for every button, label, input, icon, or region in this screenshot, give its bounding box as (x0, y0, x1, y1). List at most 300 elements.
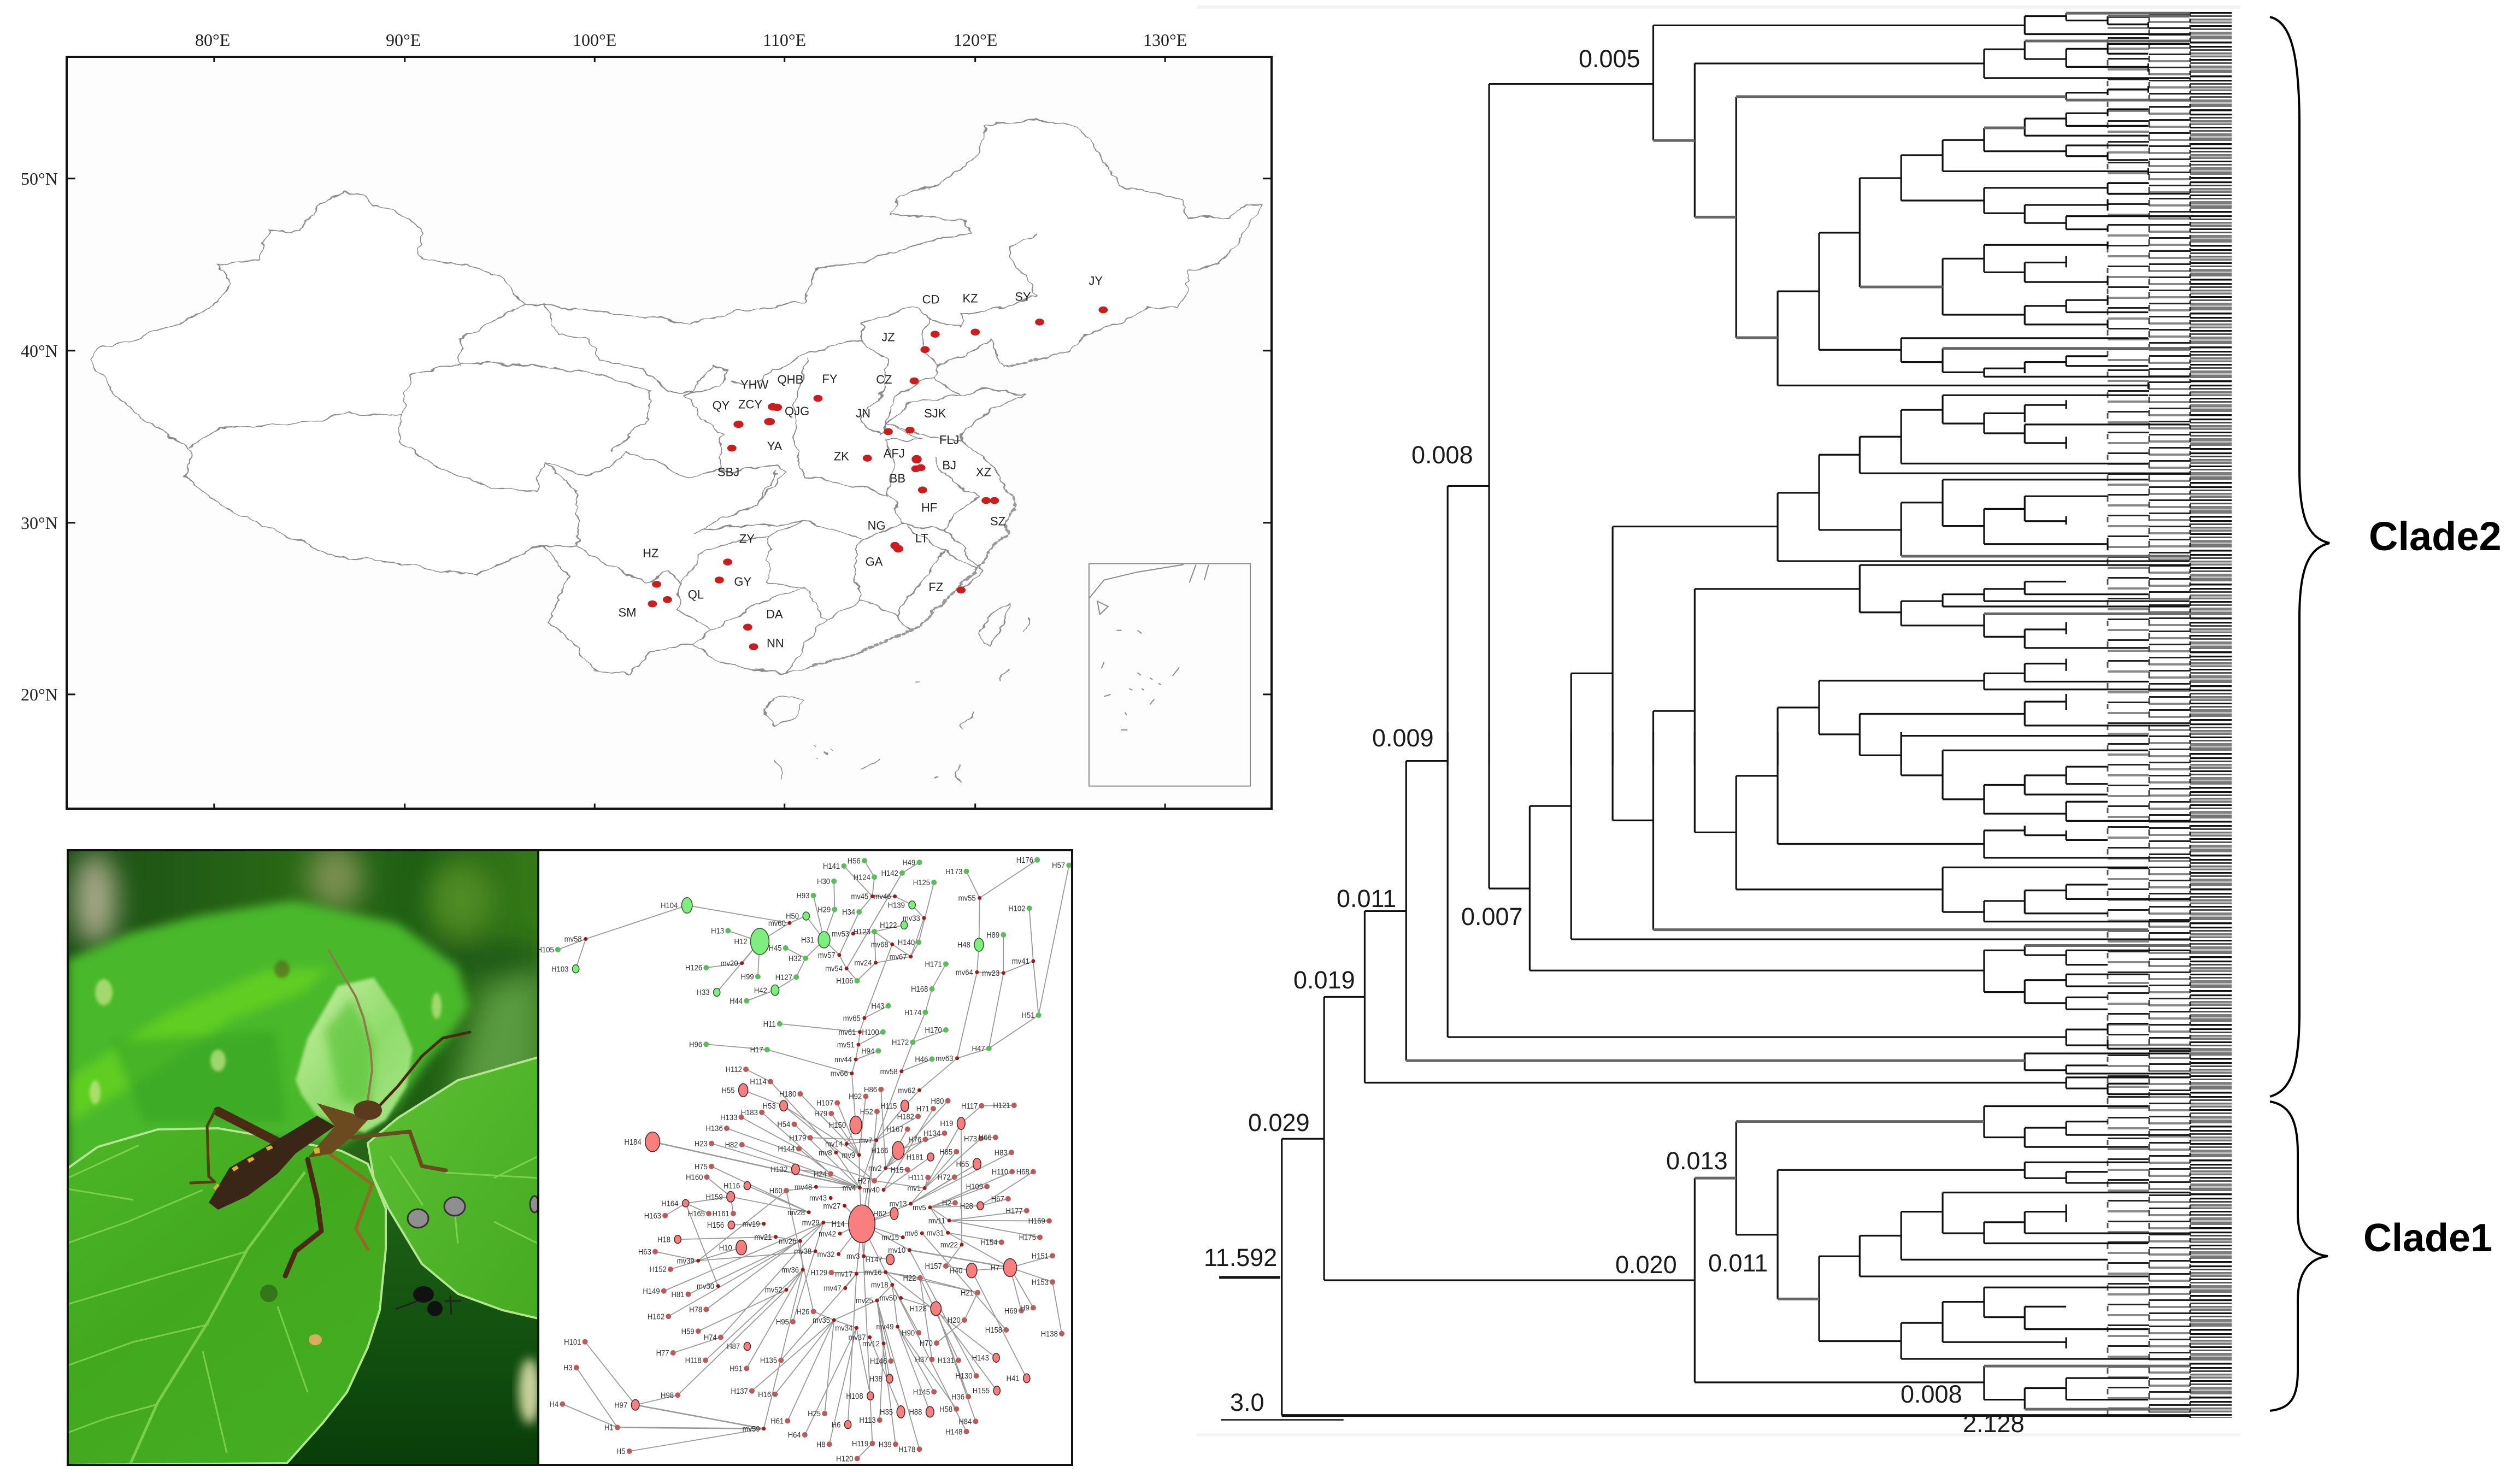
network node labels: H130 (955, 1371, 973, 1380)
network node labels: H11 (763, 1019, 776, 1028)
axis tick labels: 110°E (763, 30, 806, 50)
network node labels: H125 (913, 878, 930, 887)
network node labels: H158 (985, 1325, 1002, 1334)
branch value labels: 0.011 (1337, 885, 1396, 912)
network node labels: H95 (776, 1317, 789, 1326)
network node labels: mv22 (940, 1240, 958, 1249)
network node labels: mv27 (823, 1201, 841, 1210)
branch value labels: 0.019 (1293, 966, 1355, 994)
network node labels: mv41 (1012, 956, 1029, 965)
network node labels: H136 (705, 1123, 723, 1133)
network node labels: H19 (940, 1118, 954, 1128)
network node labels: H62 (873, 1209, 886, 1218)
site code labels: AFJ (884, 447, 905, 461)
branch value labels: 0.013 (1666, 1147, 1728, 1175)
outlines with hand-drawn wobble (90, 119, 1261, 781)
network node labels: H116 (723, 1181, 740, 1190)
network node labels: H35 (880, 1407, 893, 1416)
network node labels: H176 (1016, 855, 1033, 864)
network node labels: H117 (961, 1101, 978, 1110)
site code labels: SM (618, 605, 636, 619)
network node labels: mv51 (837, 1040, 855, 1049)
orange egg (309, 1334, 322, 1345)
network node labels: H59 (681, 1327, 695, 1336)
network node labels: H145 (913, 1387, 930, 1397)
panel: map of China (21, 30, 1272, 809)
network node labels: H137 (731, 1386, 748, 1395)
network node labels: H91 (729, 1364, 743, 1373)
network node labels: H107 (816, 1098, 833, 1108)
network node labels: H64 (788, 1430, 801, 1439)
network node labels: H160 (686, 1173, 703, 1182)
small red haplotype nodes (562, 1069, 1062, 1459)
network node labels: mv23 (982, 968, 999, 977)
network node labels: H86 (864, 1085, 877, 1094)
network node labels: H100 (862, 1027, 879, 1037)
network node labels: mv62 (898, 1086, 916, 1095)
site code labels: CZ (876, 373, 892, 386)
site code labels: ZY (739, 532, 755, 546)
network node labels: H118 (685, 1356, 702, 1365)
site code labels: GY (734, 575, 751, 588)
network node labels: H53 (763, 1101, 776, 1110)
axis tick labels: 30°N (21, 513, 58, 533)
network node labels: H46 (915, 1055, 928, 1064)
network node labels: H157 (925, 1261, 942, 1270)
network node labels: H162 (648, 1312, 664, 1321)
network node labels: H131 (938, 1356, 955, 1365)
network node labels: H55 (722, 1086, 735, 1095)
network node labels: mv67 (890, 952, 907, 961)
site code labels: KZ (962, 292, 978, 305)
network node labels: H183 (741, 1108, 758, 1117)
network node labels: mv68 (871, 940, 889, 949)
network node labels: H170 (925, 1025, 942, 1034)
province borders (191, 233, 1037, 673)
network node labels: H178 (898, 1445, 916, 1454)
network node labels: H45 (769, 943, 782, 952)
axis tick labels: 80°E (195, 30, 230, 50)
network node labels: H50 (786, 911, 799, 921)
network node labels: H175 (1019, 1233, 1036, 1242)
network node labels: mv5 (913, 1203, 926, 1212)
network node labels: H63 (638, 1247, 651, 1256)
network node labels: H154 (980, 1238, 998, 1247)
network node labels: H31 (801, 935, 814, 944)
network node labels: mv48 (795, 1182, 812, 1192)
network node labels: H124 (854, 873, 870, 882)
network node labels: H32 (789, 953, 802, 963)
site code labels: QHB (778, 373, 803, 386)
upright light leaf (296, 977, 413, 1133)
site code labels: FZ (928, 580, 943, 594)
pale background blob (519, 1358, 540, 1424)
photo background (69, 851, 537, 1230)
dark lower background (288, 1241, 537, 1464)
dark speck on leaf (260, 1285, 278, 1302)
network node labels: H47 (972, 1044, 985, 1053)
network node labels: H49 (902, 858, 915, 867)
network node labels: mv38 (794, 1246, 811, 1256)
site code labels: LT (915, 532, 928, 545)
network node labels: H168 (911, 984, 928, 993)
network node labels: mv46 (874, 892, 891, 901)
network node labels: H132 (770, 1164, 788, 1174)
network node labels: H122 (880, 920, 897, 929)
network node labels: mv6 (904, 1228, 918, 1238)
network node labels: H89 (986, 930, 999, 939)
network node labels: mv7 (859, 1135, 873, 1145)
network node labels: H110 (992, 1167, 1008, 1176)
network node labels: H161 (713, 1209, 729, 1218)
network node labels: H174 (904, 1008, 921, 1017)
network node labels: mv14 (825, 1139, 843, 1149)
network node labels: H139 (888, 900, 905, 910)
network node labels: mv1 (907, 1183, 921, 1193)
network node labels: H115 (880, 1101, 897, 1110)
network node labels: mv24 (854, 958, 872, 967)
site code labels (618, 274, 1103, 650)
map geography (67, 57, 1272, 809)
axis tick labels: 130°E (1143, 30, 1187, 50)
upper tree branches (1448, 13, 2190, 765)
network node labels: H148 (945, 1427, 963, 1436)
panel: insect photo (68, 845, 540, 1465)
network node labels: H147 (865, 1255, 883, 1264)
network node labels (537, 855, 1065, 1463)
network node labels: H66 (979, 1133, 992, 1142)
axis tick labels: 100°E (573, 30, 616, 50)
network node labels: mv3 (846, 1251, 860, 1261)
network node labels: H123 (854, 927, 870, 936)
network node labels: H180 (779, 1089, 796, 1098)
brace: Clade1 (2270, 1102, 2328, 1411)
network node labels: mv47 (824, 1283, 842, 1293)
network node labels: H111 (908, 1173, 924, 1182)
network node labels: H25 (808, 1409, 821, 1418)
network node labels: H80 (931, 1096, 944, 1105)
network node labels: H171 (925, 959, 942, 969)
network node labels: mv64 (956, 968, 973, 977)
network node labels: mv55 (958, 893, 976, 903)
eggs on leaf (408, 1196, 539, 1228)
network node labels: H4 (550, 1399, 558, 1409)
network node labels: H30 (817, 876, 830, 886)
branch value labels: 0.007 (1461, 903, 1523, 931)
network node labels: mv11 (928, 1216, 945, 1225)
site code labels: ZCY (738, 397, 762, 411)
combined photo and network frame (68, 850, 1072, 1465)
network node labels: mv61 (838, 1027, 856, 1037)
network node labels: mv37 (848, 1333, 866, 1342)
network node labels: mv52 (765, 1285, 783, 1294)
axis tick labels: 50°N (21, 169, 58, 189)
network node labels: H7 (991, 1263, 999, 1272)
inset map (1089, 563, 1250, 786)
network node labels: H172 (892, 1038, 909, 1047)
network edges (558, 860, 1069, 1140)
network node labels: H61 (770, 1416, 784, 1426)
network node labels: mv31 (926, 1228, 944, 1238)
site code labels: SZ (990, 515, 1005, 528)
network node labels: H93 (796, 891, 810, 900)
network node labels: H28 (960, 1201, 973, 1210)
branch value labels (1204, 45, 2025, 1438)
tip comb (2108, 12, 2232, 1418)
network node labels: mv26 (779, 1236, 796, 1246)
network node labels: H163 (644, 1211, 661, 1220)
network node labels: mv59 (743, 1424, 760, 1433)
network node labels: mv34 (835, 1323, 852, 1333)
network node labels: H18 (657, 1235, 670, 1244)
network node labels: mv45 (851, 892, 868, 901)
network node labels: mv53 (832, 929, 849, 938)
network node labels: H144 (778, 1144, 795, 1153)
network node labels: H103 (551, 964, 569, 974)
site code labels: XZ (976, 465, 991, 479)
site code labels: ZK (834, 449, 849, 463)
network node labels: H65 (956, 1159, 969, 1169)
network node labels: H179 (789, 1133, 807, 1143)
network node labels: H94 (861, 1046, 874, 1056)
network node labels: H56 (848, 856, 861, 865)
median vector nodes (586, 896, 1033, 1429)
network node labels: H90 (902, 1328, 915, 1338)
network node labels: H109 (966, 1182, 983, 1191)
network node labels: H141 (823, 861, 840, 870)
network node labels: H138 (1041, 1329, 1058, 1338)
network node labels: mv32 (817, 1250, 835, 1259)
network node labels: H57 (1052, 861, 1065, 870)
network node labels: H184 (624, 1137, 642, 1146)
network node labels: H134 (923, 1128, 941, 1138)
network node labels: mv16 (864, 1268, 882, 1277)
blurred background leaves (73, 845, 538, 1107)
network node labels: H15 (891, 1165, 904, 1174)
network node labels: mv29 (802, 1218, 820, 1227)
site code labels: JN (856, 407, 870, 420)
network node labels: H155 (973, 1386, 990, 1395)
site code labels: QJG (785, 404, 809, 418)
network node labels: H128 (910, 1304, 927, 1313)
network node labels: H92 (849, 1092, 862, 1101)
network node labels: mv49 (876, 1322, 894, 1331)
network node labels: H41 (1007, 1374, 1020, 1383)
site code labels: BJ (942, 458, 956, 472)
network node labels: H33 (697, 987, 710, 997)
small green haplotype nodes (558, 860, 1069, 1059)
network node labels: mv42 (819, 1229, 836, 1238)
branch value labels: 0.008 (1901, 1380, 1962, 1408)
network node labels: H165 (688, 1209, 705, 1218)
network node labels: H58 (939, 1404, 952, 1414)
network node labels: mv12 (862, 1339, 880, 1348)
network node labels: mv33 (903, 914, 920, 923)
network node labels: H164 (661, 1199, 679, 1208)
network node labels: H73 (964, 1134, 977, 1143)
site code labels: YA (767, 439, 783, 453)
network node labels: H79 (814, 1109, 827, 1118)
network node labels: H16 (758, 1389, 771, 1399)
label: Clade2: Clade2 (2369, 514, 2502, 559)
network node labels: mv4 (843, 1183, 856, 1192)
main foreground leaf (68, 1128, 386, 1465)
network node labels: H153 (1032, 1277, 1049, 1287)
site code labels: NN (767, 637, 784, 650)
network node labels: H104 (661, 900, 678, 910)
network node labels: mv19 (743, 1219, 760, 1228)
branch value labels: 11.592 (1204, 1244, 1277, 1271)
network node labels: H71 (916, 1104, 929, 1113)
network node labels: H39 (879, 1440, 892, 1449)
network node labels: mv58 (880, 1067, 898, 1076)
network node labels: H149 (643, 1286, 660, 1295)
network node labels: H142 (881, 868, 898, 878)
network node labels: H119 (852, 1439, 868, 1448)
network node labels: H2 (942, 1198, 951, 1208)
network node labels: H36 (951, 1392, 964, 1401)
large green haplotype nodes (573, 898, 984, 997)
network node labels: H133 (720, 1112, 738, 1122)
axis tick labels: 90°E (386, 30, 421, 50)
network node labels: mv60 (768, 918, 786, 928)
network node labels: H38 (869, 1374, 883, 1383)
national outline (90, 119, 1261, 675)
network node labels: H84 (958, 1417, 972, 1426)
ant (396, 1286, 461, 1316)
branch value labels: 0.008 (1411, 441, 1473, 469)
network node labels: H6 (832, 1420, 841, 1429)
network node labels: H23 (695, 1139, 708, 1148)
network node labels: H76 (908, 1135, 921, 1144)
site code labels: GA (866, 555, 883, 568)
branch value labels: 2.128 (1963, 1410, 2025, 1438)
insect: body (209, 1100, 382, 1210)
network node labels: H72 (938, 1173, 951, 1182)
site code labels: FLJ (939, 433, 960, 446)
network node labels: H169 (1028, 1216, 1045, 1226)
network node labels: H87 (727, 1341, 740, 1351)
network node labels: H29 (817, 905, 831, 914)
network node labels: mv36 (781, 1265, 799, 1274)
network node labels: H1 (604, 1423, 614, 1432)
network node labels: H97 (614, 1400, 627, 1410)
site code labels: QY (713, 398, 730, 412)
network node labels: H106 (836, 976, 854, 985)
network node labels: H140 (898, 938, 915, 947)
branch value labels: 0.020 (1615, 1251, 1677, 1279)
network node labels: mv10 (888, 1245, 905, 1255)
network node labels: H70 (920, 1338, 933, 1347)
network node labels: H127 (775, 973, 792, 982)
network node labels: H121 (993, 1100, 1010, 1110)
network node labels: mv30 (697, 1281, 714, 1291)
network node labels: H60 (769, 1186, 783, 1195)
site code labels: JZ (881, 330, 895, 344)
network node labels: H51 (1021, 1010, 1035, 1020)
network node labels: H101 (564, 1337, 581, 1346)
network node labels: H159 (705, 1192, 723, 1202)
site code labels: YHW (740, 378, 769, 392)
network node labels: mv35 (813, 1315, 830, 1324)
site code labels: SJK (924, 407, 946, 420)
network node labels: mv8 (819, 1148, 832, 1157)
leaf veins (68, 1145, 538, 1463)
network node labels: H99 (741, 972, 754, 981)
network graph (537, 855, 1069, 1463)
network node labels: H5 (616, 1446, 626, 1456)
network node labels: H3 (563, 1363, 573, 1372)
network node labels: mv9 (842, 1150, 855, 1159)
network node labels: H150 (829, 1120, 846, 1129)
network node labels: mv18 (871, 1280, 889, 1289)
network node labels: H126 (685, 963, 702, 972)
network node labels: H82 (725, 1140, 738, 1149)
network node labels: mv65 (843, 1014, 861, 1023)
network node labels: H102 (1008, 904, 1026, 913)
site code labels: HF (921, 500, 937, 514)
branch value labels: 0.011 (1708, 1249, 1768, 1277)
site code labels: JY (1089, 274, 1103, 288)
network node labels: H98 (661, 1391, 674, 1400)
network node labels: H74 (704, 1333, 717, 1342)
network node labels: H85 (939, 1147, 952, 1156)
network node labels: mv58 (564, 934, 582, 944)
network node labels: H34 (842, 907, 855, 916)
network node labels: mv28 (787, 1208, 805, 1217)
axis tick labels: 20°N (21, 685, 58, 704)
network node labels: H120 (836, 1454, 854, 1463)
network node labels: H68 (1016, 1167, 1029, 1176)
network node labels: H12 (734, 937, 748, 946)
network node labels: mv40 (862, 1185, 880, 1194)
network node labels: H108 (846, 1391, 863, 1400)
network node labels: H69 (1004, 1306, 1017, 1315)
network panel background (538, 850, 1072, 1465)
network node labels: H75 (695, 1162, 708, 1171)
network node labels: mv15 (881, 1233, 899, 1242)
network node labels: H27 (857, 1176, 870, 1185)
network node labels: H13 (711, 926, 724, 935)
site code labels: SY (1015, 290, 1031, 304)
network node labels: H43 (871, 1001, 885, 1010)
network node labels: H37 (915, 1355, 928, 1364)
network node labels: mv21 (754, 1232, 772, 1241)
network node labels: H88 (909, 1407, 922, 1416)
brace: Clade2 (2270, 17, 2329, 1097)
network node labels: mv17 (835, 1269, 852, 1279)
network node labels: H21 (961, 1288, 974, 1297)
network node labels: H152 (649, 1264, 667, 1274)
network node labels: H167 (886, 1124, 904, 1134)
network node labels: H146 (870, 1356, 887, 1365)
network node labels: H20 (948, 1315, 961, 1324)
network node labels: H78 (689, 1305, 702, 1314)
site code labels: SBJ (717, 465, 739, 479)
blurred pale spots (90, 979, 442, 1104)
network node labels: H14 (832, 1219, 845, 1228)
branch value labels: 3.0 (1230, 1388, 1264, 1416)
network node labels: mv20 (721, 958, 738, 968)
network node labels: H143 (972, 1353, 989, 1362)
network node labels: H156 (707, 1220, 724, 1229)
network node labels: mv54 (825, 964, 843, 973)
network node labels: H181 (907, 1152, 923, 1162)
network node labels: H67 (991, 1194, 1004, 1203)
network node labels: H44 (729, 996, 743, 1005)
network node labels: H105 (537, 945, 554, 954)
large red haplotype nodes (631, 1083, 1030, 1429)
